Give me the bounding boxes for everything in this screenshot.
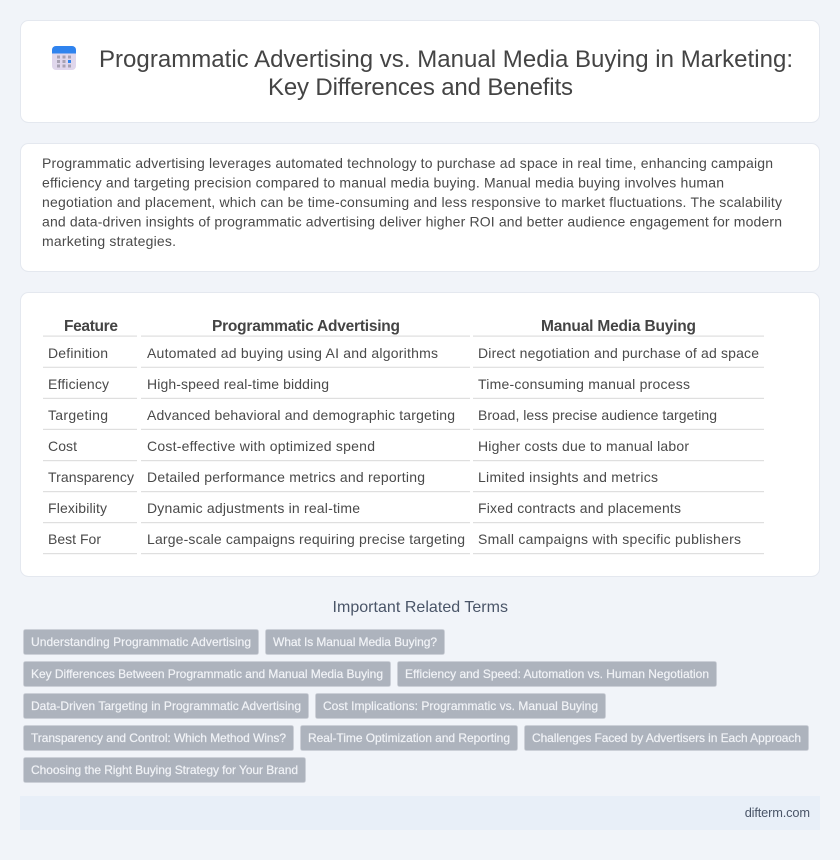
- panel: comparison table: [20, 292, 820, 576]
- table row: efficiency: Efficiency: [48, 376, 109, 392]
- tags: related terms: Transparency and Control: Which Method Wins?: [31, 731, 286, 745]
- table row: flexibility: [48, 500, 681, 516]
- table row: cost: Higher costs due to manual labor: [478, 438, 689, 454]
- panel: header: [20, 20, 820, 122]
- table row: best for: Large-scale campaigns requiring precise targeting: [147, 531, 465, 547]
- table row: flexibility: Fixed contracts and placements: [478, 500, 681, 516]
- table row: targeting: Advanced behavioral and demographic targeting: [147, 407, 455, 423]
- table row: transparency: Transparency: [48, 469, 134, 485]
- tags: related terms: Data-Driven Targeting in Programmatic Advertising: [31, 699, 301, 713]
- tags: related terms: Efficiency and Speed: Automation vs. Human Negotiation: [405, 667, 709, 681]
- table row: targeting: [48, 407, 717, 423]
- tags: related terms: Choosing the Right Buying Strategy for Your Brand: [31, 763, 298, 777]
- panel: introduction: [20, 144, 820, 272]
- table header row: Manual Media Buying: [541, 318, 696, 335]
- table row: best for: Small campaigns with specific publishers: [478, 531, 741, 547]
- table row: definition: Direct negotiation and purchase of ad space: [478, 345, 759, 361]
- table row: cost: Cost: [48, 438, 77, 454]
- tags: related terms: [24, 630, 808, 782]
- table row: transparency: [48, 469, 658, 485]
- table row: best for: [48, 531, 741, 547]
- table row: efficiency: [48, 376, 690, 392]
- title: Key Differences and Benefits: [268, 74, 573, 101]
- table row: flexibility: Flexibility: [48, 500, 107, 516]
- tags: related terms: Key Differences Between Programmatic and Manual Media Buying: [31, 667, 383, 681]
- text block: introduction paragraph: efficiency and targeting precision compared to manual media buying. Manual media buying involves human: [42, 174, 724, 190]
- tags: related terms: Understanding Programmatic Advertising: [31, 635, 251, 649]
- tags: related terms: Challenges Faced by Advertisers in Each Approach: [532, 731, 801, 745]
- table row: definition: Automated ad buying using AI and algorithms: [147, 345, 438, 361]
- table header row: Programmatic Advertising: [212, 318, 400, 335]
- text block: introduction paragraph: and data-driven insights of programmatic advertising deliver higher ROI and better audience engagement for modern: [42, 214, 782, 230]
- table row: targeting: Targeting: [48, 407, 108, 423]
- table header row: Feature: [64, 318, 118, 335]
- tags: related terms: Cost Implications: Programmatic vs. Manual Buying: [323, 699, 598, 713]
- table row: targeting: Broad, less precise audience targeting: [478, 407, 717, 423]
- table header row: [64, 318, 696, 335]
- table row: flexibility: Dynamic adjustments in real-time: [147, 500, 360, 516]
- icon: calendar: [52, 46, 76, 70]
- table row: efficiency: High-speed real-time bidding: [147, 376, 329, 392]
- table row: transparency: Limited insights and metrics: [478, 469, 658, 485]
- table row: cost: [48, 438, 689, 454]
- tags: related terms: What Is Manual Media Buying?: [273, 635, 437, 649]
- text block: introduction paragraph: negotiation and placement, which can be time-consuming and less responsive to market fluctuations. The scalability: [42, 194, 782, 210]
- title: [99, 46, 793, 101]
- table row: definition: Definition: [48, 345, 108, 361]
- table row: cost: Cost-effective with optimized spend: [147, 438, 375, 454]
- text block: introduction paragraph: Programmatic advertising leverages automated technology to purchase ad space in real time, enhancing campaign: [42, 155, 773, 171]
- heading: important related terms: Important Related Terms: [332, 599, 508, 616]
- footer: [20, 796, 820, 830]
- tags: related terms: Real-Time Optimization and Reporting: [308, 731, 510, 745]
- table row: transparency: Detailed performance metrics and reporting: [147, 469, 425, 485]
- table row: definition: [48, 345, 759, 361]
- title: Programmatic Advertising vs. Manual Media Buying in Marketing:: [99, 46, 793, 73]
- text block: introduction paragraph: [42, 155, 782, 249]
- footer: difterm.com: [745, 805, 810, 820]
- table row: efficiency: Time-consuming manual process: [478, 376, 690, 392]
- table row: best for: Best For: [48, 531, 101, 547]
- text block: introduction paragraph: marketing strategies.: [42, 233, 176, 249]
